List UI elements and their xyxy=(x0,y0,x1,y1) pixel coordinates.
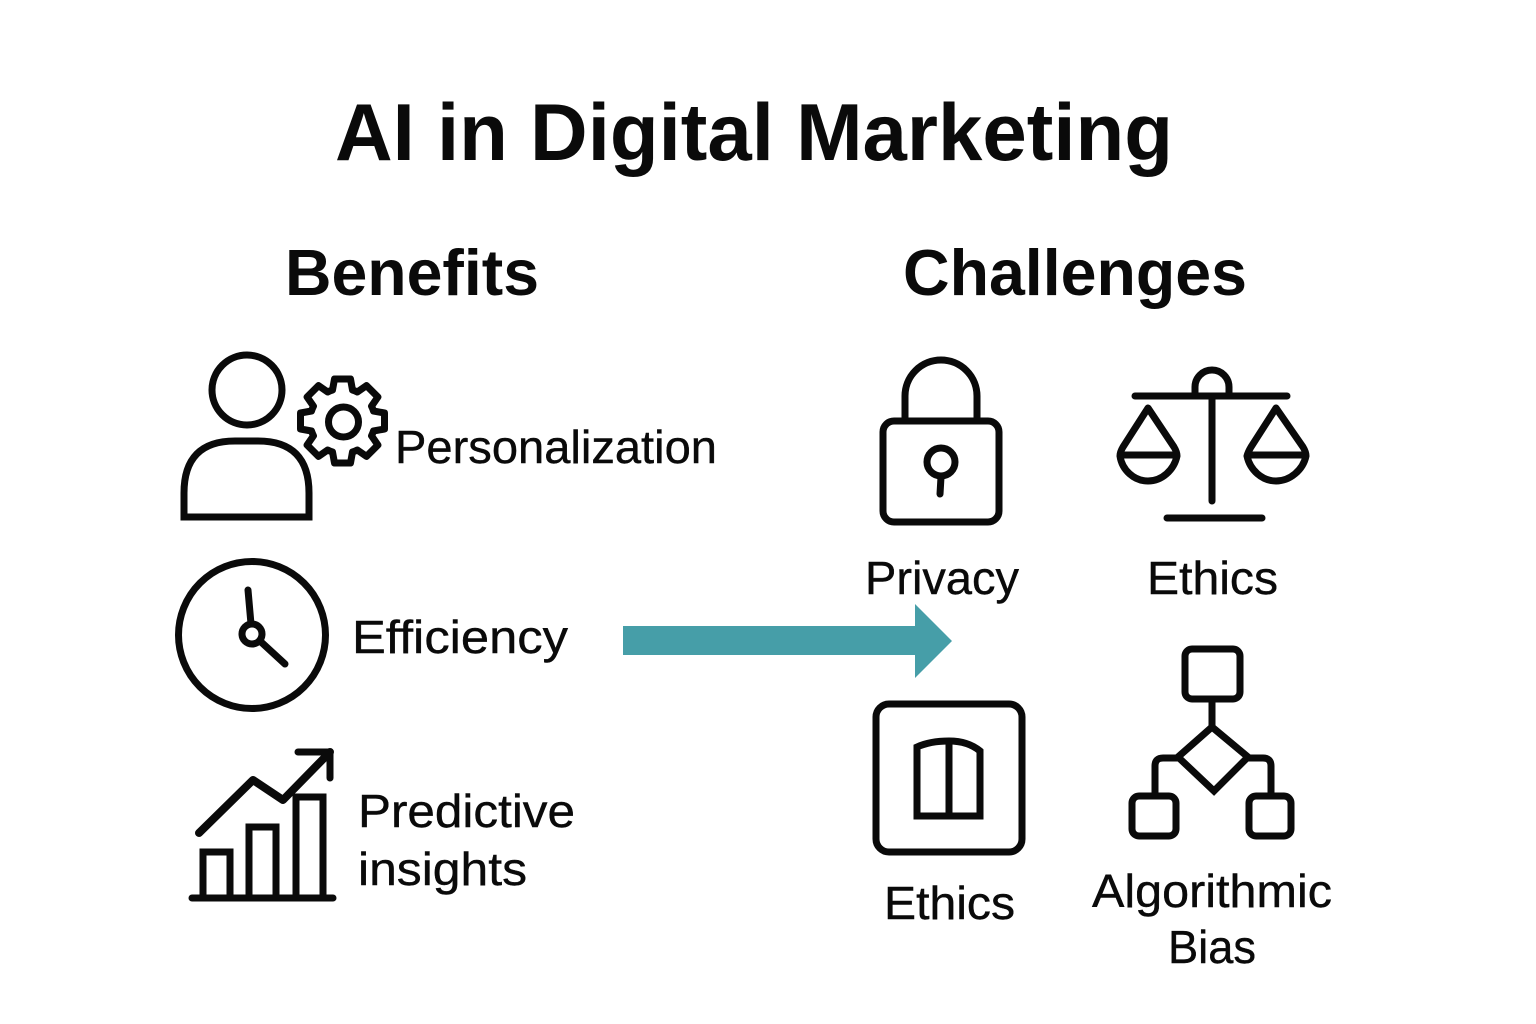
item: ethics box xyxy=(876,704,1022,929)
item: privacy xyxy=(865,360,1019,604)
panel: benefits xyxy=(178,236,717,898)
heading: benefits: Benefits xyxy=(285,236,539,309)
item: algorithmic bias xyxy=(1092,649,1332,973)
icon: balance scales xyxy=(1120,370,1306,518)
arrow: benefits to challenges xyxy=(623,604,952,678)
label: algorithmic bias: Bias xyxy=(1168,921,1256,973)
item: personalization xyxy=(184,355,717,517)
item: predictive insights xyxy=(192,752,575,898)
label: predictive insights: insights xyxy=(358,843,527,895)
icon: growth chart xyxy=(192,752,333,898)
item: ethics scales xyxy=(1120,370,1306,604)
icon: framed book xyxy=(876,704,1022,852)
label: algorithmic bias: Algorithmic xyxy=(1092,865,1332,917)
icon: padlock xyxy=(883,360,999,522)
icon: clock xyxy=(178,562,326,708)
label: predictive insights: Predictive xyxy=(358,785,575,837)
title: AI in Digital Marketing xyxy=(335,88,1173,178)
label: algorithmic bias xyxy=(1092,865,1332,973)
panel: challenges xyxy=(865,236,1332,973)
heading: challenges: Challenges xyxy=(903,236,1247,309)
label: ethics: Ethics xyxy=(1147,552,1278,604)
label: efficiency: Efficiency xyxy=(352,611,568,663)
icon: flow diagram xyxy=(1132,649,1291,836)
label: personalization: Personalization xyxy=(395,421,717,473)
icon: person with gear xyxy=(184,355,384,517)
label: predictive insights xyxy=(358,785,575,895)
item: efficiency xyxy=(178,562,568,708)
label: privacy: Privacy xyxy=(865,552,1019,604)
label: ethics: Ethics xyxy=(884,877,1015,929)
